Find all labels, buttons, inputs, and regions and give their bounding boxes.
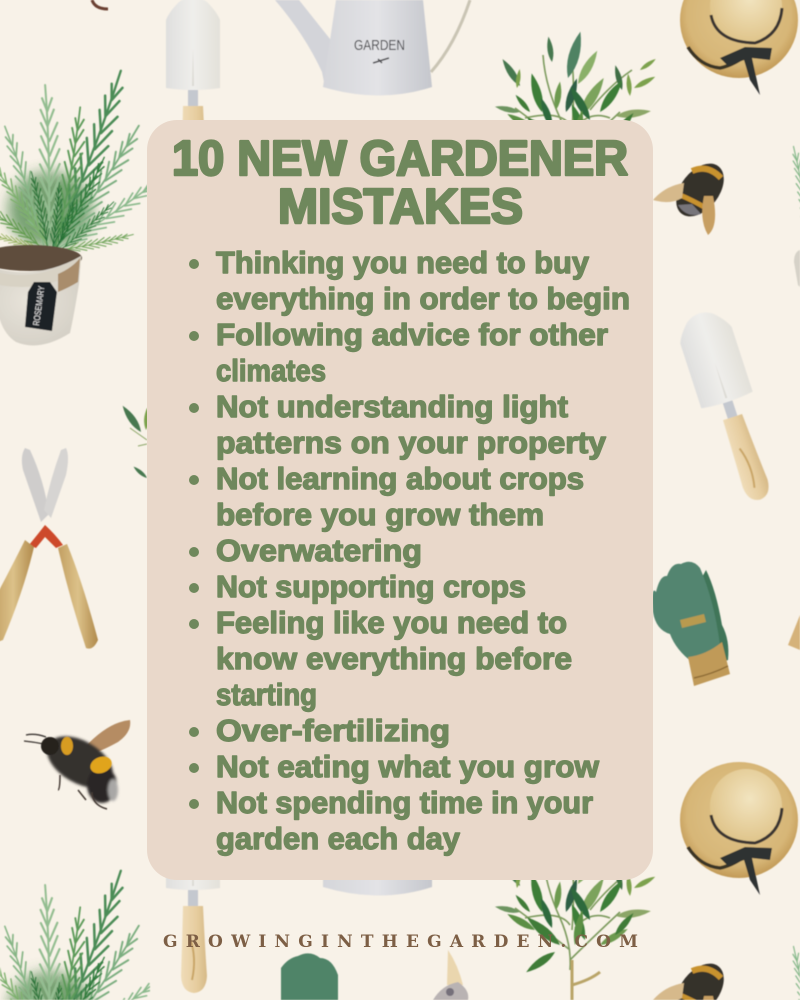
list item 10 <box>189 786 593 856</box>
icon: bumblebee lower right <box>650 960 730 1000</box>
list item 2: Following advice for other <box>216 318 608 352</box>
icon: potted rosemary <box>0 67 164 345</box>
icon: watering can base lower <box>323 875 432 896</box>
list item 1: Thinking you need to buy <box>216 246 589 280</box>
icon: rosemary lower right edge <box>780 940 800 1000</box>
list item 2 <box>189 318 608 388</box>
icon: rosemary at right edge <box>789 145 800 287</box>
icon: watering can <box>275 0 470 96</box>
icon: straw hat top <box>680 0 798 95</box>
list item 1: everything in order to begin <box>216 282 630 316</box>
icon: olive plant top <box>494 30 657 175</box>
icon: glove lower <box>281 953 338 1000</box>
icon: straw hat lower <box>680 762 798 895</box>
icon: pruning shears lower <box>433 950 468 1000</box>
icon: olive tree lower <box>490 870 660 1000</box>
list item 2: climates <box>216 354 326 388</box>
list item 9: Not eating what you grow <box>216 750 599 784</box>
icon: shears handle on right edge <box>788 615 800 650</box>
icon: trowel right <box>673 305 785 508</box>
icon: flying bumblebee <box>24 720 130 809</box>
title: MISTAKES <box>278 180 523 234</box>
footer website: GROWINGINTHEGARDEN.COM <box>163 932 638 952</box>
list item 3 <box>189 390 606 460</box>
list item 10: garden each day <box>216 822 460 856</box>
list item 5: Overwatering <box>216 534 422 568</box>
icon: garden trowel lower <box>166 797 220 993</box>
icon: olive leaves left of panel <box>120 404 150 479</box>
icon: garden shears <box>0 448 98 649</box>
list item 4 <box>189 462 584 532</box>
panel: mistakes list <box>147 120 653 880</box>
list item 7: starting <box>216 678 317 712</box>
list item 7: know everything before <box>216 642 572 676</box>
icon: garden trowel top <box>166 0 220 193</box>
list item 4: before you grow them <box>216 498 544 532</box>
icon: gardening gloves <box>652 562 730 686</box>
title <box>172 132 628 234</box>
list item 4: Not learning about crops <box>216 462 584 496</box>
title: 10 NEW GARDENER <box>172 132 628 186</box>
icon: watering can: GARDEN <box>354 37 405 54</box>
icon: bee leg at top edge <box>92 0 108 9</box>
icon: rosemary lower <box>0 860 150 1000</box>
list item 3: Not understanding light <box>216 390 568 424</box>
list item 7 <box>189 606 572 712</box>
list item 1 <box>189 246 630 316</box>
list item 6: Not supporting crops <box>216 570 526 604</box>
list item 3: patterns on your property <box>216 426 606 460</box>
icon: bumblebee top right <box>653 155 733 235</box>
icon: potted rosemary: ROSEMARY <box>31 285 47 326</box>
list item 10: Not spending time in your <box>216 786 593 820</box>
list item 7: Feeling like you need to <box>216 606 567 640</box>
list item 8: Over-fertilizing <box>216 714 450 748</box>
